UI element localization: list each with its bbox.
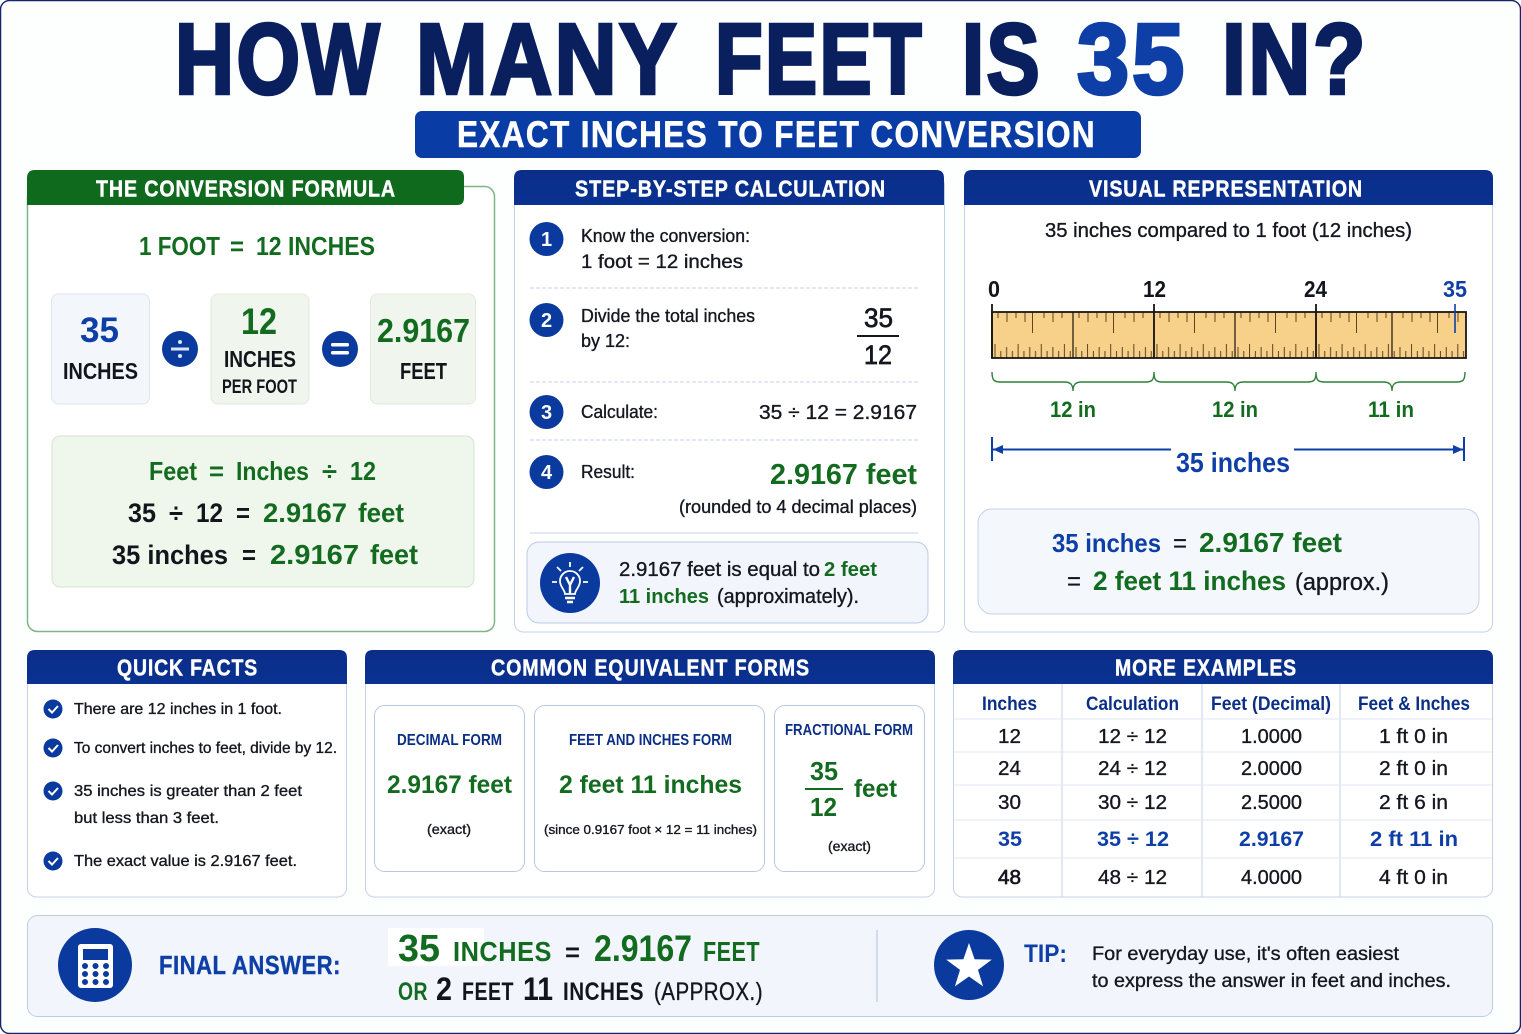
card: fractional form: 35 bbox=[810, 756, 838, 786]
row: 24: 24 ÷ 12 bbox=[1098, 757, 1167, 780]
formula box: 2.9167 bbox=[270, 539, 359, 570]
table header row: Inches bbox=[982, 694, 1037, 715]
card: 35 inches: INCHES bbox=[63, 358, 138, 384]
row: 24: 2 ft 0 in bbox=[1379, 757, 1448, 780]
card: fractional form: feet bbox=[854, 775, 898, 803]
callout: result summary: (approx.) bbox=[1295, 569, 1389, 596]
step 3: Calculate: bbox=[581, 402, 658, 422]
label: tip: TIP: bbox=[1024, 940, 1067, 968]
row: 24: 24 bbox=[998, 757, 1021, 780]
row: 48: 48 bbox=[998, 866, 1021, 889]
fact 3: but less than 3 feet. bbox=[74, 810, 219, 827]
icon: light bulb bbox=[540, 553, 600, 613]
card: 35 inches: 35 bbox=[80, 311, 119, 350]
icon: star bbox=[934, 930, 1004, 1000]
title: MANY bbox=[416, 4, 679, 116]
row: 30 bbox=[998, 791, 1448, 814]
table header row: Feet (Decimal) bbox=[1211, 694, 1331, 715]
icon: divide bbox=[162, 331, 198, 367]
card: feet and inches form: FEET AND INCHES FORM bbox=[569, 732, 732, 749]
row: 30: 2.5000 bbox=[1241, 791, 1302, 814]
row: 12: 12 ÷ 12 bbox=[1098, 725, 1167, 748]
braces and segment labels bbox=[992, 372, 1465, 422]
heading: the conversion formula bbox=[27, 170, 464, 205]
formula box: 12 bbox=[196, 498, 223, 528]
ruler: 12 bbox=[1143, 276, 1166, 302]
final answer value: 11 bbox=[523, 971, 553, 1007]
card: decimal form: 2.9167 feet bbox=[387, 771, 513, 799]
step 4: 2.9167 feet bbox=[770, 459, 917, 491]
fraction: 35 over 12: 12 bbox=[864, 340, 892, 370]
fact 4: The exact value is 2.9167 feet. bbox=[74, 853, 297, 870]
formula box: 12 bbox=[350, 456, 376, 486]
table header row: Feet & Inches bbox=[1358, 694, 1470, 715]
formula box: 35 bbox=[128, 498, 156, 528]
fact 3: 35 inches is greater than 2 feet bbox=[74, 783, 303, 800]
callout: result summary: 2 feet 11 inches bbox=[1093, 566, 1286, 596]
formula box: ÷ bbox=[322, 456, 337, 486]
row: 12 bbox=[998, 725, 1448, 748]
card: 2.9167 feet bbox=[370, 294, 476, 404]
step 3 bbox=[530, 395, 917, 429]
row: 24: 2.0000 bbox=[1241, 757, 1302, 780]
ruler: 24 bbox=[1304, 276, 1327, 302]
row: 35 highlighted bbox=[998, 828, 1458, 851]
title: IS bbox=[962, 4, 1042, 116]
heading: step-by-step: STEP-BY-STEP CALCULATION bbox=[575, 176, 886, 202]
callout: result summary: = bbox=[1173, 528, 1187, 558]
row: 30: 30 bbox=[998, 791, 1021, 814]
callout: approximate equivalent bbox=[527, 542, 928, 623]
final answer value bbox=[388, 928, 763, 1007]
row: 48 bbox=[998, 866, 1448, 889]
row: 12: 12 bbox=[998, 725, 1021, 748]
text: comparison caption: 35 inches compared to 1 foot (12 inches) bbox=[1045, 220, 1412, 242]
heading: more examples bbox=[953, 650, 1493, 684]
heading: step-by-step bbox=[514, 170, 944, 205]
label: final answer: FINAL ANSWER: bbox=[159, 950, 341, 980]
final answer value: FEET bbox=[703, 936, 760, 967]
heading: visual representation bbox=[964, 170, 1493, 205]
step 1: Know the conversion: bbox=[581, 226, 750, 246]
row: 48: 4.0000 bbox=[1241, 866, 1302, 889]
subtitle banner: EXACT INCHES TO FEET CONVERSION bbox=[457, 114, 1096, 155]
panel: quick facts bbox=[27, 650, 347, 897]
panel: final answer and tip bbox=[28, 916, 1492, 1016]
callout: approximate equivalent: 2 feet bbox=[824, 559, 877, 581]
card: fractional form bbox=[774, 706, 924, 872]
card: 12 inches per foot: PER FOOT bbox=[222, 377, 297, 398]
step 1: 1 foot = 12 inches bbox=[581, 252, 743, 273]
tip text: to express the answer in feet and inches. bbox=[1092, 970, 1451, 992]
step 2: Divide the total inches bbox=[581, 306, 755, 326]
formula box: Feet bbox=[149, 456, 197, 486]
card: fractional form: (exact) bbox=[828, 838, 871, 854]
fraction: 35 over 12 bbox=[857, 303, 899, 370]
step 4: (rounded to 4 decimal places) bbox=[679, 497, 917, 517]
final answer value: 2 bbox=[436, 971, 452, 1007]
card: feet and inches form: 2 feet 11 inches bbox=[559, 771, 742, 799]
icon: equals bbox=[322, 331, 358, 367]
step 3: 35 ÷ 12 = 2.9167 bbox=[759, 402, 917, 424]
card: 2.9167 feet: FEET bbox=[400, 358, 447, 384]
ruler bbox=[988, 276, 1467, 358]
arrow: 35 inches span bbox=[992, 437, 1464, 478]
formula box: 35 inches bbox=[112, 540, 228, 570]
formula box bbox=[52, 436, 474, 587]
formula box: 2.9167 bbox=[263, 498, 347, 528]
text: 1 foot = 12 inches: 1 FOOT bbox=[139, 231, 220, 261]
text: 1 foot = 12 inches bbox=[139, 231, 375, 261]
braces and segment labels: 12 in bbox=[1050, 397, 1096, 422]
fact 3 bbox=[44, 782, 303, 827]
final answer value: = bbox=[565, 937, 580, 967]
heading: visual representation: VISUAL REPRESENTATION bbox=[1089, 176, 1363, 202]
row: 35 highlighted: 35 ÷ 12 bbox=[1097, 828, 1169, 851]
title: IN? bbox=[1222, 4, 1368, 116]
formula box: = bbox=[242, 540, 256, 570]
heading: common equivalent forms: COMMON EQUIVALENT FORMS bbox=[491, 654, 810, 680]
step 2: 2 bbox=[541, 310, 552, 332]
card: 12 inches per foot: 12 bbox=[241, 301, 277, 342]
braces and segment labels: 11 in bbox=[1368, 397, 1414, 422]
callout: result summary bbox=[978, 509, 1479, 614]
card: 2.9167 feet: 2.9167 bbox=[377, 312, 470, 349]
tip text: For everyday use, it's often easiest bbox=[1092, 943, 1400, 965]
callout: result summary: 2.9167 feet bbox=[1199, 527, 1342, 558]
card: 35 inches bbox=[52, 294, 150, 404]
panel: more examples table bbox=[953, 650, 1493, 897]
final answer value: (APPROX.) bbox=[654, 978, 763, 1006]
title bbox=[175, 4, 1368, 116]
panel: step-by-step calculation bbox=[514, 170, 944, 632]
step 1: 1 bbox=[541, 229, 552, 251]
panel: visual representation bbox=[964, 170, 1493, 632]
step 2 bbox=[530, 303, 899, 370]
callout: approximate equivalent: 11 inches bbox=[619, 586, 709, 608]
heading: quick facts: QUICK FACTS bbox=[117, 654, 258, 680]
icon: calculator bbox=[58, 928, 132, 1002]
card: 12 inches per foot: INCHES bbox=[224, 346, 296, 372]
card: decimal form: DECIMAL FORM bbox=[397, 732, 502, 749]
heading: quick facts bbox=[27, 650, 347, 684]
step 4: 4 bbox=[541, 462, 553, 484]
row: 35 highlighted: 35 bbox=[998, 828, 1022, 851]
heading: common equivalent forms bbox=[365, 650, 935, 684]
formula box: = bbox=[236, 498, 250, 528]
step 1 bbox=[530, 222, 750, 273]
ruler: 35 bbox=[1443, 276, 1467, 302]
step 2: by 12: bbox=[581, 331, 630, 351]
title: 35 bbox=[1077, 4, 1187, 116]
row: 30: 2 ft 6 in bbox=[1379, 791, 1448, 814]
card: decimal form: (exact) bbox=[427, 821, 471, 837]
callout: approximate equivalent: 2.9167 feet is equal to bbox=[619, 559, 820, 581]
step 4: Result: bbox=[581, 462, 635, 482]
arrow: 35 inches span: 35 inches bbox=[1176, 447, 1290, 478]
fact 2: To convert inches to feet, divide by 12. bbox=[74, 740, 337, 757]
fraction: 35 over 12: 35 bbox=[864, 303, 893, 333]
row: 35 highlighted: 2 ft 11 in bbox=[1370, 828, 1458, 851]
row: 24 bbox=[998, 757, 1448, 780]
table header row: Calculation bbox=[1086, 694, 1179, 715]
formula box: = bbox=[209, 456, 224, 486]
row: 12: 1.0000 bbox=[1241, 725, 1302, 748]
formula box: feet bbox=[370, 539, 418, 570]
table header row bbox=[982, 694, 1470, 715]
text: 1 foot = 12 inches: 12 INCHES bbox=[256, 231, 375, 261]
final answer value: FEET bbox=[462, 978, 514, 1006]
card: fractional form: FRACTIONAL FORM bbox=[785, 722, 913, 739]
row: 48: 48 ÷ 12 bbox=[1098, 866, 1167, 889]
card: feet and inches form bbox=[534, 706, 764, 872]
braces and segment labels: 12 in bbox=[1212, 397, 1258, 422]
final answer value: 2.9167 bbox=[594, 928, 692, 969]
title: HOW bbox=[175, 4, 382, 116]
title: FEET bbox=[715, 4, 924, 116]
row: 35 highlighted: 2.9167 bbox=[1239, 828, 1304, 851]
final answer value: INCHES bbox=[453, 936, 552, 967]
panel: common equivalent forms bbox=[365, 650, 935, 897]
heading: the conversion formula: THE CONVERSION FORMULA bbox=[96, 176, 396, 202]
text: 1 foot = 12 inches: = bbox=[230, 231, 244, 261]
row: 12: 1 ft 0 in bbox=[1379, 725, 1448, 748]
ruler: 0 bbox=[988, 276, 1000, 302]
row: 48: 4 ft 0 in bbox=[1379, 866, 1448, 889]
step 3: 3 bbox=[541, 402, 552, 424]
formula box: Inches bbox=[236, 456, 309, 486]
card: decimal form bbox=[374, 706, 524, 872]
fact 1: There are 12 inches in 1 foot. bbox=[74, 701, 282, 718]
tip text bbox=[1092, 943, 1451, 992]
final answer value: OR bbox=[398, 978, 428, 1006]
formula box: ÷ bbox=[169, 498, 183, 528]
step 4 bbox=[530, 455, 917, 517]
heading: more examples: MORE EXAMPLES bbox=[1115, 654, 1297, 680]
formula box: feet bbox=[358, 498, 404, 528]
final answer value: 35 bbox=[398, 928, 440, 970]
callout: approximate equivalent: (approximately). bbox=[717, 586, 859, 608]
card: 12 inches per foot bbox=[211, 294, 309, 404]
callout: result summary: 35 inches bbox=[1052, 528, 1161, 558]
panel: the conversion formula bbox=[27, 170, 494, 632]
callout: result summary: = bbox=[1067, 566, 1081, 596]
card: feet and inches form: (since 0.9167 foot × 12 = 11 inches) bbox=[544, 822, 757, 837]
card: fractional form: 12 bbox=[810, 792, 837, 822]
row: 30: 30 ÷ 12 bbox=[1098, 791, 1167, 814]
final answer value: INCHES bbox=[563, 978, 644, 1006]
